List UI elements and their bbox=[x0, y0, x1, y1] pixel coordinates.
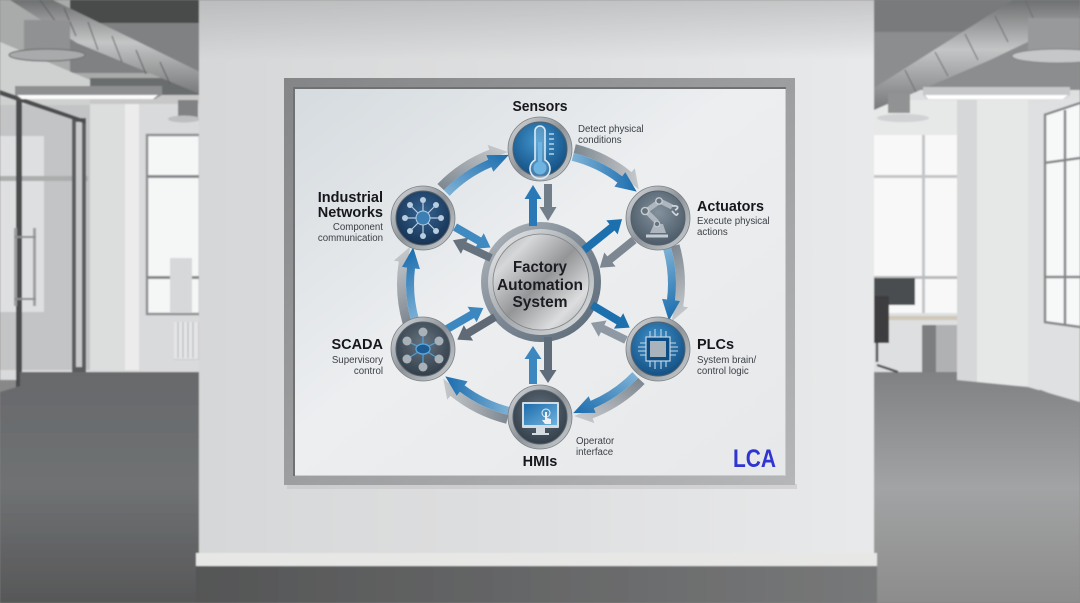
left ceiling lamp bbox=[15, 86, 162, 99]
arrow: actuators to PLCs bbox=[636, 241, 711, 322]
left room bbox=[0, 0, 200, 390]
baseboard bbox=[196, 553, 877, 566]
label: sensors: Sensors bbox=[512, 99, 568, 115]
label: actuators: Execute physical bbox=[697, 216, 770, 227]
spoke: HMIs to hub bbox=[524, 346, 542, 384]
icon: robot arm bbox=[641, 198, 678, 236]
logo: LCA: LCA bbox=[733, 445, 776, 473]
hub outer ring bbox=[481, 222, 601, 342]
left floor bbox=[0, 372, 200, 603]
hub title line 2: Automation bbox=[497, 277, 583, 294]
spoke: hub to actuators bbox=[578, 212, 628, 257]
frame shadow bbox=[287, 484, 797, 489]
right duct bbox=[874, 0, 1080, 122]
arrow: sensors to actuators bbox=[572, 144, 639, 192]
label: HMIs: interface bbox=[576, 447, 613, 458]
frame bbox=[284, 78, 795, 485]
label: HMIs bbox=[523, 436, 615, 470]
arrow: HMIs to SCADA bbox=[443, 376, 510, 424]
icon: thermometer bbox=[530, 126, 554, 179]
label: actuators bbox=[697, 199, 770, 238]
hub brushed disc bbox=[493, 234, 589, 330]
spoke: sensors to hub bbox=[540, 184, 556, 221]
right room bbox=[874, 0, 1080, 405]
spoke: networks to hub bbox=[450, 219, 495, 255]
spoke: hub to networks bbox=[449, 232, 495, 266]
label: industrial networks: Component bbox=[333, 222, 383, 233]
spoke: PLCs to hub bbox=[587, 315, 630, 348]
label: HMIs: Operator bbox=[576, 436, 615, 447]
frame inner highlight bbox=[293, 87, 786, 476]
wall bbox=[199, 0, 874, 553]
label: SCADA: Supervisory bbox=[332, 355, 383, 366]
label: sensors bbox=[512, 99, 644, 146]
wall floor strip bbox=[196, 566, 877, 603]
radiator bbox=[174, 322, 198, 359]
label: sensors: conditions bbox=[578, 135, 622, 146]
node: industrial networks bbox=[391, 186, 455, 250]
hub silver ring bbox=[488, 229, 594, 335]
label: actuators: actions bbox=[697, 227, 728, 238]
icon: supervisory network bbox=[402, 328, 444, 372]
spoke: SCADA to hub bbox=[442, 300, 488, 337]
label: HMIs: HMIs bbox=[523, 454, 557, 470]
label: PLCs: System brain/ bbox=[697, 355, 757, 366]
node: sensors bbox=[508, 117, 572, 181]
label: industrial networks: Industrial bbox=[318, 190, 383, 206]
label: industrial networks: communication bbox=[318, 233, 383, 244]
label: sensors: Detect physical bbox=[578, 124, 644, 135]
right desk and chair bbox=[874, 278, 957, 372]
node: HMIs bbox=[508, 385, 572, 449]
icon: touch monitor bbox=[522, 402, 559, 435]
label: PLCs bbox=[697, 337, 757, 377]
label: industrial networks: Networks bbox=[318, 205, 383, 221]
arrow: SCADA to networks bbox=[371, 246, 446, 327]
frame inner edge bbox=[293, 87, 786, 476]
wall top shade bbox=[199, 0, 874, 60]
label: SCADA: control bbox=[354, 366, 383, 377]
icon: processor chip bbox=[638, 329, 678, 369]
framed board bbox=[284, 78, 797, 489]
board surface bbox=[295, 89, 785, 475]
center hub bbox=[481, 222, 601, 342]
icon: network star bbox=[402, 197, 444, 239]
spoke arrows bbox=[442, 184, 640, 384]
hub title: Factory bbox=[513, 259, 567, 276]
arrow: networks to sensors bbox=[435, 129, 510, 211]
right floor bbox=[874, 372, 1080, 603]
spoke: hub to HMIs bbox=[540, 337, 556, 383]
label: SCADA: SCADA bbox=[331, 337, 384, 353]
label: industrial networks bbox=[318, 190, 383, 244]
label: actuators: Actuators bbox=[697, 199, 764, 215]
spoke: hub to sensors bbox=[524, 185, 542, 226]
spoke: actuators to hub bbox=[594, 233, 640, 275]
label: PLCs: control logic bbox=[697, 366, 749, 377]
right ceiling lamp bbox=[923, 87, 1070, 99]
node: SCADA bbox=[391, 317, 455, 381]
left duct bbox=[9, 0, 200, 122]
node: PLCs bbox=[626, 317, 690, 381]
hub title line 3: System bbox=[512, 294, 568, 311]
label: PLCs: PLCs bbox=[697, 337, 734, 353]
cycle arrows bbox=[371, 129, 711, 439]
spoke: hub to PLCs bbox=[587, 297, 634, 335]
label: SCADA bbox=[331, 337, 384, 377]
node: actuators bbox=[626, 186, 690, 250]
spoke: hub to SCADA bbox=[453, 309, 500, 347]
arrow: PLCs to HMIs bbox=[572, 357, 647, 439]
